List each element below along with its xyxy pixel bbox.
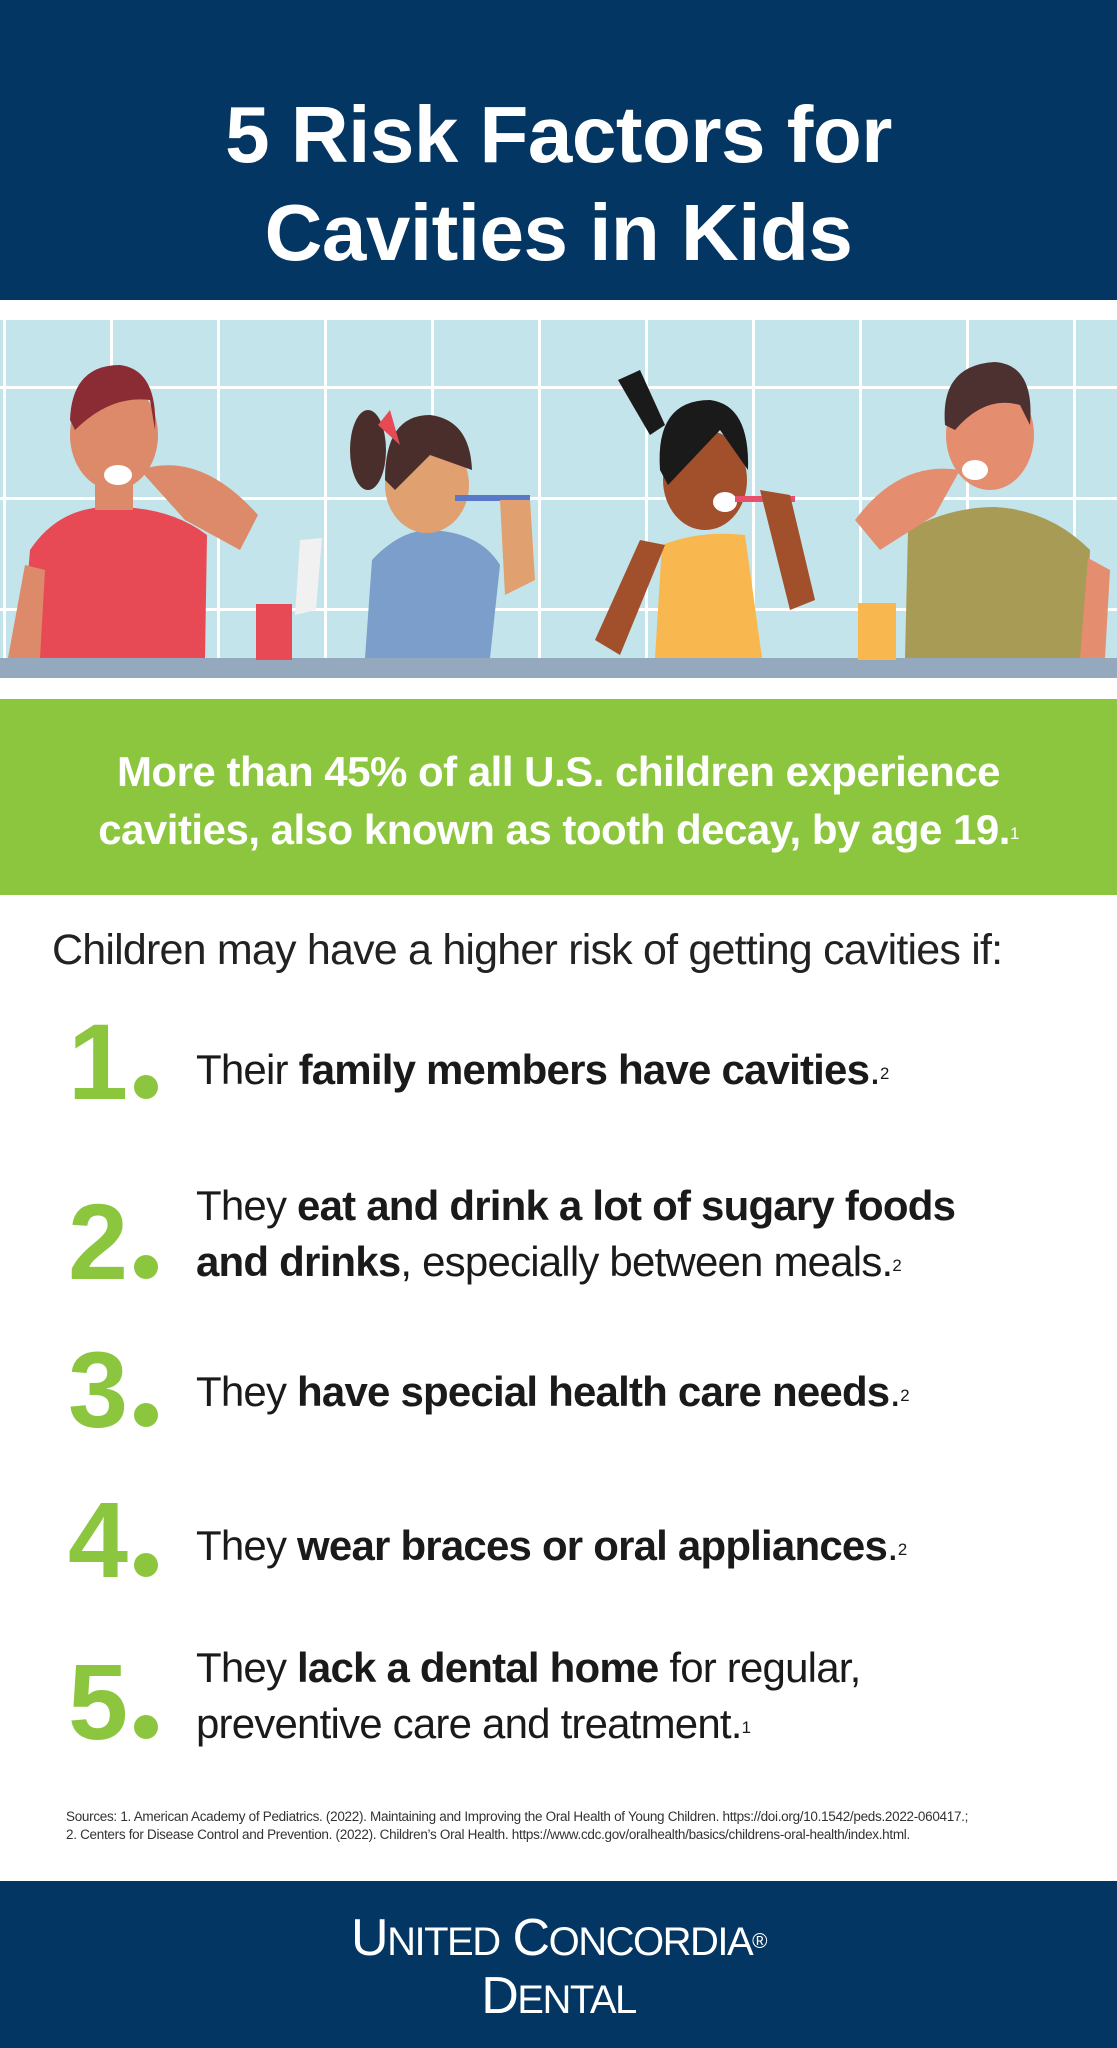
item 4: They wear braces or oral appliances.2: [196, 1522, 906, 1569]
kid 4: [855, 362, 1110, 658]
footer logo: UNITED CONCORDIA®: [351, 1909, 766, 1967]
illustration: kids brushing teeth: [0, 320, 1117, 678]
kid 1: [8, 365, 258, 658]
stat banner: More than 45% of all U.S. children experience: [117, 748, 1000, 795]
item 4: [68, 1479, 906, 1600]
item 2: 2: [68, 1181, 128, 1302]
item 3: 3: [68, 1329, 128, 1450]
stat banner: [0, 699, 1117, 895]
title: 5 Risk Factors for: [225, 90, 892, 179]
title: Cavities in Kids: [265, 188, 852, 277]
item 4: 4: [68, 1479, 128, 1600]
cup yellow: [858, 603, 896, 660]
title: [0, 0, 1117, 300]
item 2: They eat and drink a lot of sugary foods: [196, 1182, 955, 1229]
cup red: [256, 604, 292, 660]
sources: Sources: 1. American Academy of Pediatrics. (2022). Maintaining and Improving the Oral Health of Young Children. https://doi.org/10.1542/peds.2022-060417.;: [66, 1809, 968, 1824]
kid 3: [595, 370, 815, 658]
sources: 2. Centers for Disease Control and Prevention. (2022). Children’s Oral Health. https://www.cdc.gov/oralhealth/basics/childrens-oral-health/index.html.: [66, 1827, 910, 1842]
sources: [66, 1809, 968, 1842]
item 2: and drinks, especially between meals.2: [196, 1238, 901, 1285]
item 5: preventive care and treatment.1: [196, 1700, 750, 1747]
counter: [0, 658, 1117, 678]
stat banner: cavities, also known as tooth decay, by age 19.1: [98, 806, 1019, 853]
kid 2: [295, 410, 535, 658]
footer logo: [0, 1881, 1117, 2048]
item 5: They lack a dental home for regular,: [196, 1644, 860, 1691]
intro text: Children may have a higher risk of getting cavities if:: [52, 926, 1002, 974]
item 5: 5: [68, 1641, 128, 1762]
item 1: [68, 1001, 889, 1122]
footer logo: DENTAL: [481, 1967, 636, 2025]
item 5: [68, 1641, 860, 1762]
item 1: 1: [68, 1001, 128, 1122]
item 3: They have special health care needs.2: [196, 1368, 909, 1415]
item 2: [68, 1181, 955, 1302]
item 1: Their family members have cavities.2: [196, 1046, 889, 1093]
item 3: [68, 1329, 909, 1450]
